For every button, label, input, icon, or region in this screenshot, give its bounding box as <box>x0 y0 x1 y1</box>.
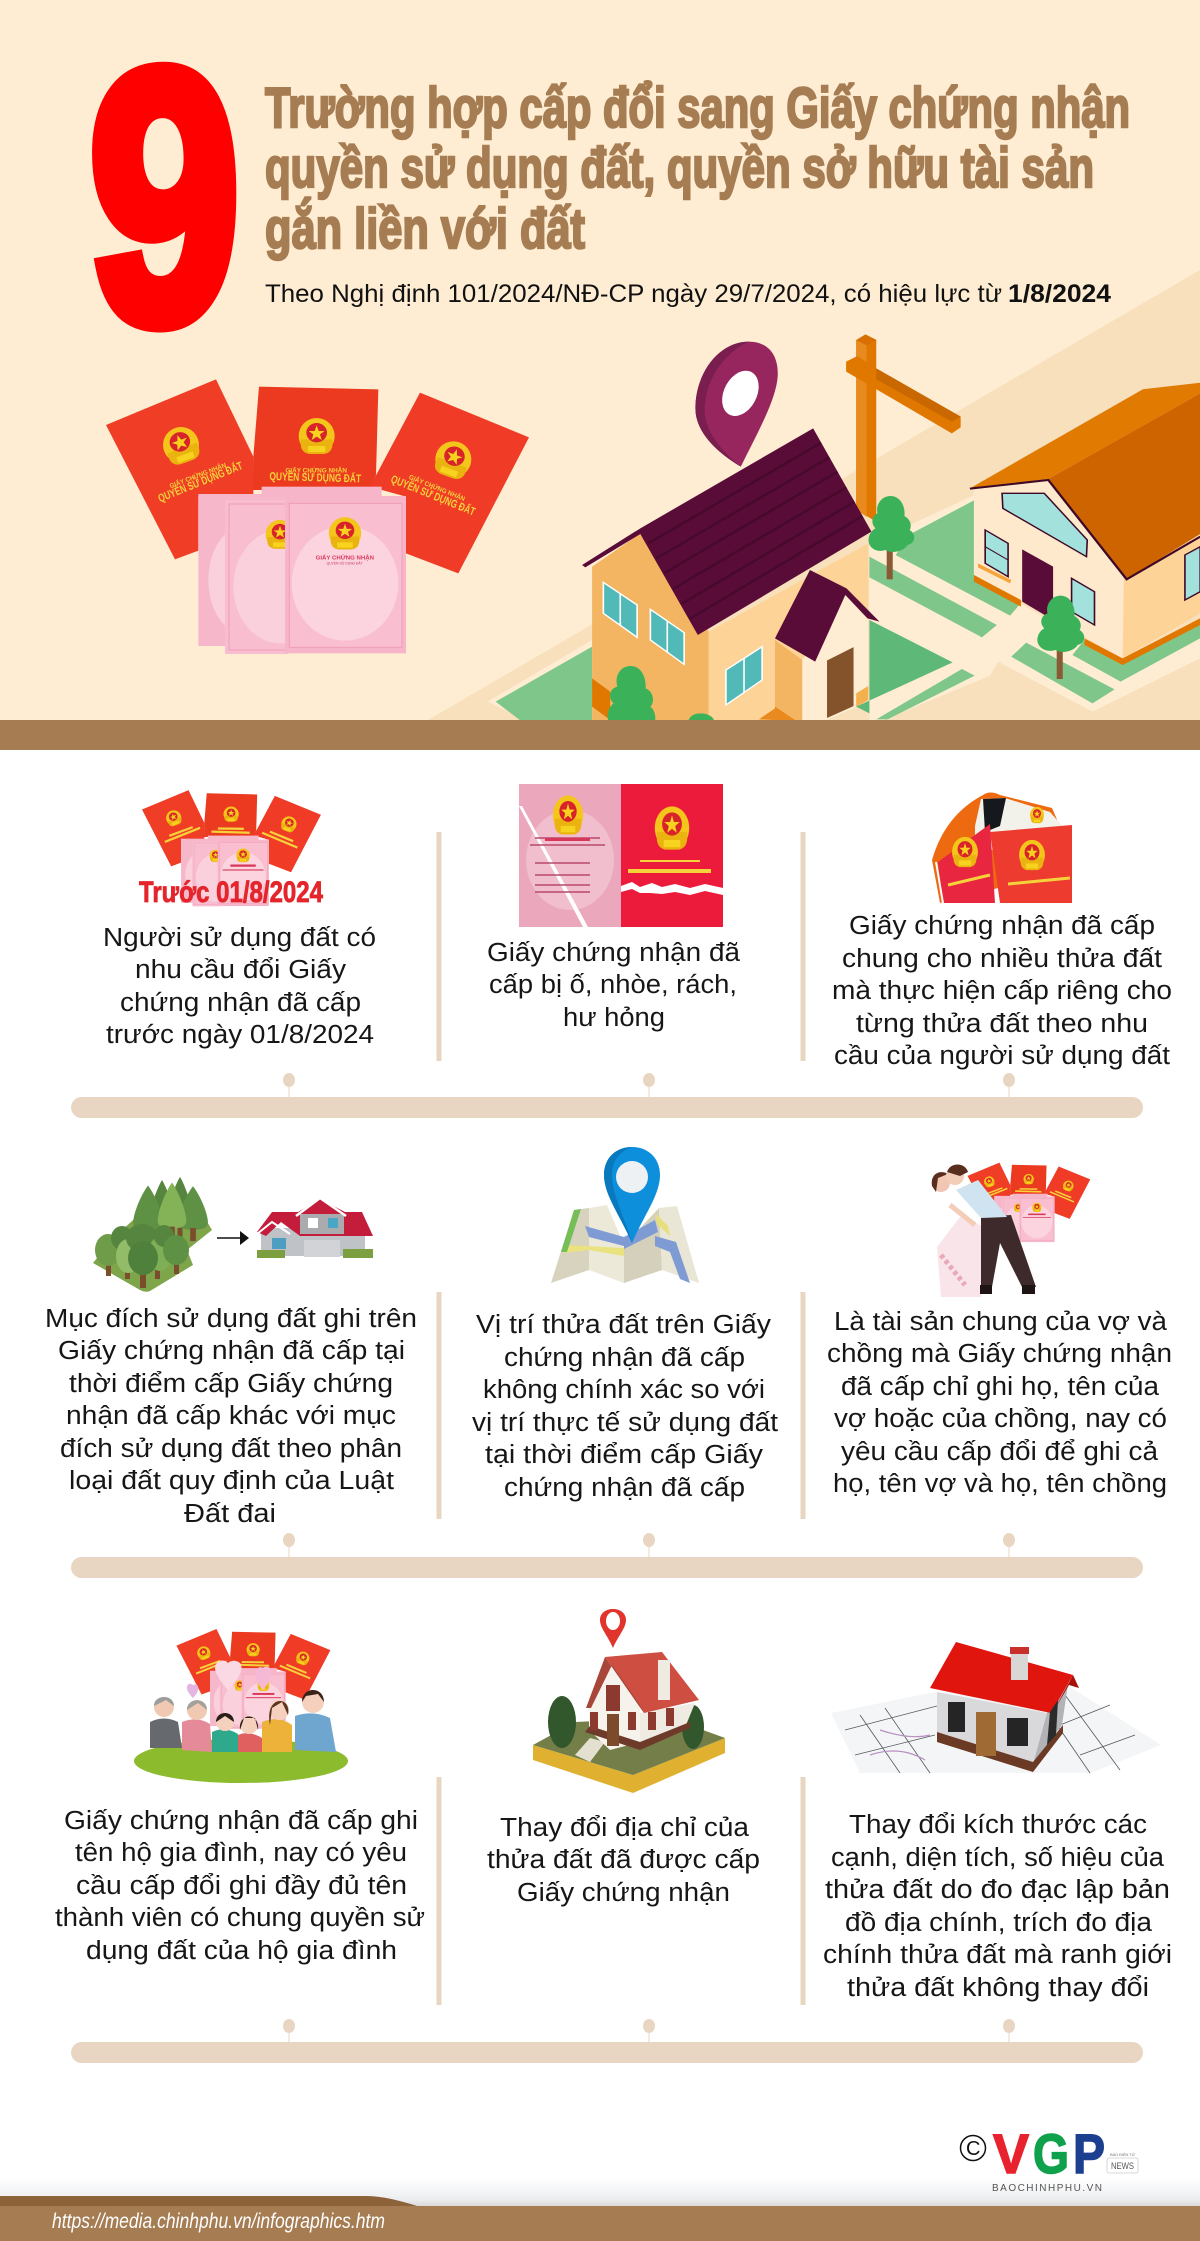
text block: Mục đích sử dụng đất ghi trên <box>45 1305 417 1333</box>
brown band under hero <box>0 720 1200 750</box>
text block: trước ngày 01/8/2024 <box>106 1021 374 1049</box>
text block: cầu của người sử dụng đất <box>834 1042 1170 1070</box>
text block: thửa đất không thay đổi <box>847 1974 1149 2002</box>
logo: VGP news: C <box>966 2138 980 2160</box>
text block: dụng đất của hộ gia đình <box>86 1937 397 1965</box>
text block: Giấy chứng nhận <box>517 1879 730 1907</box>
icon: map pin on map <box>551 1147 699 1283</box>
hero illustration: red certificates: GIẤY CHỨNG NHẬN <box>316 555 374 562</box>
item 5: plot location <box>472 1147 778 1502</box>
text block: hư hỏng <box>563 1004 665 1032</box>
footer url: https://media.chinhphu.vn/infographics.htm <box>52 2210 385 2233</box>
panel: hero header background <box>0 0 1200 720</box>
icon: house on survey chart <box>831 1642 1161 1773</box>
text block: Là tài sản chung của vợ và <box>834 1308 1168 1336</box>
title <box>265 76 1130 261</box>
title: gắn liền với đất <box>265 196 585 261</box>
item 2: damaged certificate <box>487 784 741 1032</box>
hero illustration: houses and land plots <box>488 334 1200 720</box>
text block: Người sử dụng đất có <box>103 924 376 952</box>
subtitle: 1/8/2024 <box>1008 280 1111 308</box>
text block <box>487 1814 760 1907</box>
text block: chứng nhận đã cấp <box>504 1344 745 1372</box>
text block: đồ địa chính, trích đo địa <box>845 1909 1153 1937</box>
text block: nhận đã cấp khác với mục <box>66 1402 396 1430</box>
logo: VGP news: BÁO ĐIỆN TỬ <box>1110 2152 1136 2157</box>
text block <box>55 1807 425 1965</box>
signpost <box>846 334 961 522</box>
footer band <box>0 2178 1200 2241</box>
text block: Thay đổi địa chỉ của <box>500 1814 750 1842</box>
item 7: household <box>55 1629 425 1965</box>
text block: chứng nhận đã cấp <box>120 989 361 1017</box>
left house <box>582 428 879 720</box>
text block: tại thời điểm cấp Giấy <box>485 1441 763 1469</box>
item 6: husband and wife <box>827 1163 1172 1498</box>
text block: cạnh, diện tích, số hiệu của <box>831 1844 1165 1872</box>
text block: Giấy chứng nhận đã cấp <box>849 912 1155 940</box>
text block: Thay đổi kích thước các <box>849 1811 1147 1839</box>
icon: couple with certificates <box>932 1163 1090 1297</box>
land plots <box>488 495 1200 720</box>
hero illustration: red certificates: QUYỀN SỬ DỤNG ĐẤT <box>269 470 361 485</box>
icon: family with certificates <box>134 1629 348 1783</box>
timeline row 1 <box>71 832 1143 1118</box>
hero illustration: red certificates: GIẤY CHỨNG NHẬN <box>285 464 347 474</box>
icon: forest to house <box>93 1177 373 1292</box>
text block: Đất đai <box>184 1500 276 1528</box>
text block: không chính xác so với <box>483 1376 765 1404</box>
trees <box>868 496 1084 679</box>
text block: thời điểm cấp Giấy chứng <box>69 1370 393 1398</box>
text block: yêu cầu cấp đổi để ghi cả <box>841 1438 1159 1466</box>
timeline row 2 <box>71 1292 1143 1578</box>
logo: VGP news: V <box>993 2122 1029 2185</box>
hero illustration: red certificates: GIẤY CHỨNG NHẬN <box>408 471 467 503</box>
text block: chồng mà Giấy chứng nhận <box>827 1340 1172 1368</box>
logo: VGP news: P <box>1073 2122 1105 2185</box>
text block: Vị trí thửa đất trên Giấy <box>476 1311 771 1339</box>
big number 9: 9 <box>90 0 240 396</box>
text block: chung cho nhiều thửa đất <box>842 945 1162 973</box>
icon: torn certificate <box>519 784 723 927</box>
logo: VGP news: BAOCHINHPHU.VN <box>992 2183 1102 2194</box>
item 8: address change <box>487 1609 760 1907</box>
text block <box>823 1811 1172 2002</box>
text block: Giấy chứng nhận đã cấp tại <box>58 1337 405 1365</box>
text block: mà thực hiện cấp riêng cho <box>832 977 1172 1005</box>
item 9: size and area change <box>823 1642 1172 2002</box>
logo: VGP news: G <box>1033 2122 1069 2185</box>
icon: house on plot with pin <box>533 1609 725 1793</box>
logo: VGP news: NEWS <box>1111 2161 1134 2171</box>
text block: cầu cấp đổi ghi đầy đủ tên <box>76 1872 407 1900</box>
text block: thửa đất do đo đạc lập bản <box>825 1876 1170 1904</box>
timeline row 3 <box>71 1777 1143 2063</box>
icon: certificates <box>142 790 321 906</box>
text block: loại đất quy định của Luật <box>69 1467 394 1495</box>
icon: certificate pair <box>932 792 1072 903</box>
hero illustration: red certificates: QUYỀN SỬ DỤNG ĐẤT <box>389 473 477 519</box>
right house <box>970 383 1200 665</box>
subtitle: Theo Nghị định 101/2024/NĐ-CP ngày 29/7/2024, có hiệu lực từ <box>265 280 1002 308</box>
text block: nhu cầu đổi Giấy <box>135 956 346 984</box>
text block: thành viên có chung quyền sử <box>55 1904 425 1932</box>
hero illustration: red certificates: QUYỀN SỬ DỤNG ĐẤT <box>156 459 245 505</box>
text block: chính thửa đất mà ranh giới <box>823 1941 1172 1969</box>
item 1: before 01/8/2024 <box>103 790 376 1049</box>
hero illustration: red certificates <box>106 379 529 654</box>
text block <box>832 912 1172 1070</box>
text block <box>103 924 376 1049</box>
text block: vị trí thực tế sử dụng đất <box>472 1409 778 1437</box>
text block: thửa đất đã được cấp <box>487 1846 760 1874</box>
item 3: shared certificate split <box>832 792 1172 1070</box>
hero illustration: red certificates: QUYỀN SỬ DỤNG ĐẤT <box>327 560 363 565</box>
item 4: land use purpose <box>45 1177 417 1528</box>
text block <box>472 1311 778 1502</box>
text block <box>45 1305 417 1528</box>
text block: cấp bị ố, nhòe, rách, <box>489 971 737 999</box>
text block: từng thửa đất theo nhu <box>856 1010 1148 1038</box>
label: Trước 01/8/2024: Trước 01/8/2024 <box>139 876 323 909</box>
text block <box>827 1308 1172 1498</box>
text block: Giấy chứng nhận đã cấp ghi <box>64 1807 418 1835</box>
text block: đích sử dụng đất theo phân <box>60 1435 402 1463</box>
location pin <box>695 342 778 467</box>
logo: VGP news <box>960 2122 1138 2194</box>
text block <box>487 939 741 1032</box>
text block: họ, tên vợ và họ, tên chồng <box>833 1470 1167 1498</box>
hero illustration: red certificates: GIẤY CHỨNG NHẬN <box>168 459 228 490</box>
text block: Giấy chứng nhận đã <box>487 939 741 967</box>
text block: chứng nhận đã cấp <box>504 1474 745 1502</box>
text block: vợ hoặc của chồng, nay có <box>834 1405 1167 1433</box>
text block: đã cấp chỉ ghi họ, tên của <box>841 1373 1160 1401</box>
text block: tên hộ gia đình, nay có yêu <box>75 1839 407 1867</box>
